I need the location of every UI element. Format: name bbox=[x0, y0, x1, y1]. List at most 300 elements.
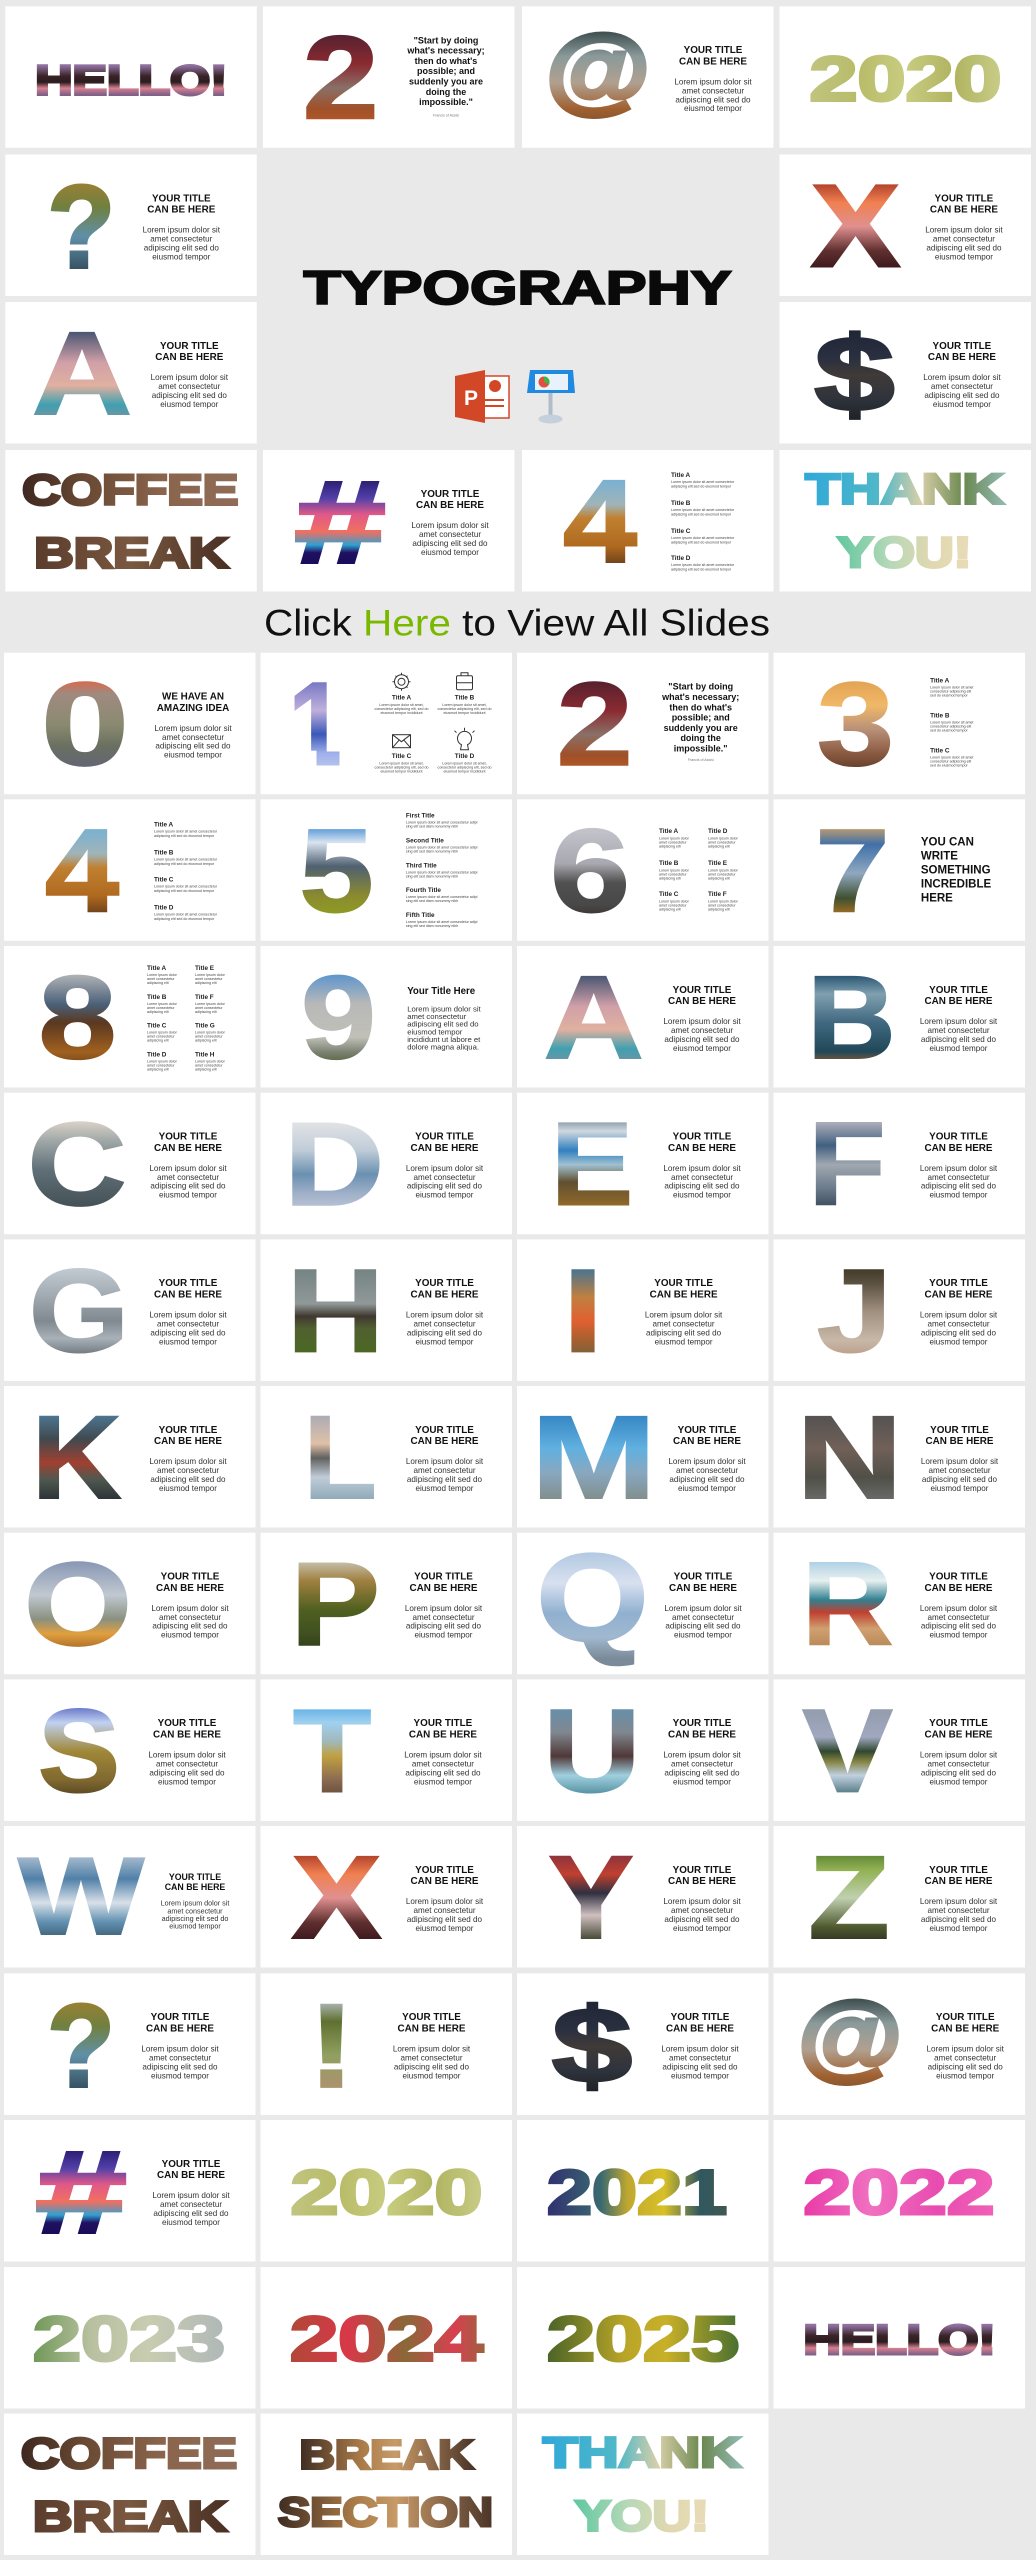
list: amet consectetur bbox=[708, 872, 736, 876]
body: Lorem ipsum dolor sit bbox=[664, 1604, 742, 1613]
body: amet consectetur bbox=[412, 1613, 475, 1622]
quote text: then do what's bbox=[669, 702, 732, 712]
body: amet consectetur bbox=[672, 1613, 734, 1622]
body: amet consectetur bbox=[159, 1613, 221, 1622]
letter O: O bbox=[24, 1539, 132, 1671]
letter S: S bbox=[38, 1685, 120, 1817]
body: Lorem ipsum dolor sit bbox=[143, 226, 220, 235]
title: YOUR TITLE bbox=[929, 1718, 988, 1729]
body: eiusmod tempor bbox=[159, 1484, 217, 1493]
list: Lorem ipsum dolor sit amet consectetur bbox=[671, 536, 735, 540]
body: eiusmod tempor bbox=[415, 1337, 474, 1346]
title: CAN BE HERE bbox=[673, 1436, 741, 1447]
body: amet consectetur bbox=[412, 1760, 474, 1769]
body: eiusmod tempor bbox=[402, 2071, 461, 2080]
slide: HELLO! bbox=[774, 2267, 1025, 2408]
body: amet consectetur bbox=[156, 1760, 218, 1769]
list: Title A bbox=[154, 821, 174, 828]
body: eiusmod tempor bbox=[158, 1777, 216, 1786]
slide: HELLO! bbox=[5, 6, 257, 148]
list: Title A bbox=[930, 678, 950, 685]
body: amet consectetur bbox=[157, 1466, 219, 1475]
word: COFFEE: COFFEE bbox=[21, 2430, 237, 2478]
list: sed do eiusmod tempor bbox=[930, 694, 968, 698]
list: adipiscing elit sed do eiusmod tempor bbox=[154, 862, 215, 866]
title: YOUR TITLE bbox=[414, 1572, 473, 1582]
captions: Title D bbox=[455, 753, 475, 760]
title: YOUR TITLE bbox=[929, 985, 988, 996]
body: adipiscing elit sed do bbox=[922, 1475, 998, 1484]
slide: I bbox=[517, 1239, 768, 1381]
letter X: X bbox=[810, 160, 900, 292]
list: Title E bbox=[708, 860, 728, 867]
quote text: then do what's bbox=[415, 56, 477, 66]
body: Lorem ipsum dolor sit bbox=[921, 1457, 998, 1466]
body: amet consectetur bbox=[682, 86, 744, 95]
list: Title C bbox=[147, 1022, 167, 1030]
body: Lorem ipsum dolor sit bbox=[154, 724, 232, 733]
body: adipiscing elit sed do bbox=[152, 1622, 228, 1631]
word: BREAK: BREAK bbox=[300, 2432, 474, 2478]
letter J: J bbox=[817, 1245, 892, 1377]
body: amet consectetur bbox=[160, 2200, 222, 2209]
body: eiusmod tempor bbox=[407, 1027, 463, 1036]
letter D: D bbox=[284, 1099, 384, 1231]
slide: 7 bbox=[774, 799, 1025, 941]
list: Lorem ipsum dolor bbox=[195, 1002, 226, 1006]
icon: gear bbox=[392, 673, 410, 691]
body: adipiscing elit sed do bbox=[921, 1035, 997, 1044]
body: eiusmod tempor bbox=[415, 1924, 474, 1933]
list: Lorem ipsum dolor sit amet consectetur adipi bbox=[406, 845, 478, 849]
list: Third Title bbox=[406, 862, 437, 869]
captions: eiusmod tempor incididunt bbox=[444, 711, 485, 715]
word: 2022: 2022 bbox=[804, 2158, 994, 2228]
body: adipiscing elit sed do bbox=[150, 1328, 226, 1337]
slide: A bbox=[5, 302, 257, 444]
body: Lorem ipsum dolor sit bbox=[645, 1311, 722, 1320]
list: Lorem ipsum dolor sit amet consectetur bbox=[154, 884, 218, 888]
body: amet consectetur bbox=[167, 1906, 223, 1915]
body: eiusmod tempor bbox=[674, 1631, 732, 1640]
captions: Title A bbox=[392, 695, 411, 702]
title: YOUR TITLE bbox=[162, 2159, 220, 2170]
title: TYPOGRAPHY: TYPOGRAPHY bbox=[304, 261, 732, 314]
body: adipiscing elit sed do bbox=[921, 1328, 997, 1337]
letter V: V bbox=[802, 1685, 892, 1817]
list: sing elit sed diam nonummy nibh bbox=[406, 849, 458, 853]
letter Z: Z bbox=[808, 1832, 890, 1964]
captions: eiusmod tempor incididunt bbox=[381, 770, 422, 774]
body: amet consectetur bbox=[413, 1466, 476, 1475]
body: adipiscing elit sed do bbox=[142, 2062, 218, 2071]
list: amet consectetur bbox=[659, 872, 687, 876]
numeral 5: 5 bbox=[300, 805, 374, 937]
quote text: what's necessary; bbox=[406, 46, 485, 56]
body: eiusmod tempor bbox=[673, 1191, 731, 1200]
body: amet consectetur bbox=[927, 1760, 990, 1769]
letter A: A bbox=[544, 952, 644, 1084]
title: YOUR TITLE bbox=[415, 1278, 474, 1289]
slide: N bbox=[774, 1386, 1025, 1528]
title: CAN BE HERE bbox=[925, 1436, 994, 1447]
list: amet consectetur bbox=[659, 840, 687, 844]
list: Lorem ipsum dolor bbox=[659, 868, 690, 872]
title: CAN BE HERE bbox=[157, 2170, 225, 2181]
title: CAN BE HERE bbox=[931, 2024, 1000, 2035]
title: CAN BE HERE bbox=[410, 1143, 479, 1154]
body: eiusmod tempor bbox=[673, 1924, 731, 1933]
title: CAN BE HERE bbox=[924, 1730, 993, 1741]
list: Title C bbox=[671, 528, 691, 535]
title: CAN BE HERE bbox=[397, 2024, 466, 2035]
body: eiusmod tempor bbox=[936, 2071, 995, 2080]
body: adipiscing elit sed do bbox=[162, 1914, 228, 1923]
captions: Lorem ipsum dolor sit amet, bbox=[442, 762, 487, 766]
list: adipiscing elit sed do eiusmod tempor bbox=[671, 568, 732, 572]
title: YOUR TITLE bbox=[678, 1425, 736, 1436]
title: YOUR TITLE bbox=[929, 1132, 988, 1142]
body: Lorem ipsum dolor sit bbox=[406, 1457, 483, 1466]
body: amet consectetur bbox=[149, 2054, 211, 2063]
body: eiusmod tempor bbox=[678, 1484, 736, 1493]
list: Lorem ipsum dolor bbox=[195, 1060, 226, 1064]
body: Lorem ipsum dolor sit bbox=[404, 1751, 482, 1760]
title: YOUR TITLE bbox=[654, 1278, 713, 1289]
word: BREAK: BREAK bbox=[34, 530, 228, 578]
slide: H bbox=[260, 1239, 512, 1381]
title: YOUR TITLE bbox=[159, 1425, 217, 1436]
letter G: G bbox=[29, 1245, 129, 1377]
body: amet consectetur bbox=[157, 1320, 219, 1329]
list: Title B bbox=[659, 860, 679, 867]
list: Lorem ipsum dolor bbox=[147, 1030, 178, 1034]
icon: PowerPoint: P bbox=[464, 387, 478, 410]
title: YOUR TITLE bbox=[673, 985, 731, 996]
body: Lorem ipsum dolor sit bbox=[411, 521, 489, 530]
word: YOU!: YOU! bbox=[838, 529, 972, 577]
title: CAN BE HERE bbox=[924, 1583, 993, 1594]
title: CAN BE HERE bbox=[147, 205, 216, 216]
list: sing elit sed diam nonummy nibh bbox=[406, 874, 458, 878]
body: Lorem ipsum dolor sit bbox=[920, 1751, 997, 1760]
title: CAN BE HERE bbox=[410, 1876, 479, 1887]
body: adipiscing elit sed do bbox=[407, 1182, 483, 1191]
word: 2021: 2021 bbox=[547, 2158, 727, 2228]
body: adipiscing elit sed do bbox=[144, 244, 219, 252]
list: Lorem ipsum dolor sit amet bbox=[930, 686, 973, 690]
slide: question mark bbox=[5, 154, 257, 296]
title: CAN BE HERE bbox=[668, 1730, 736, 1741]
list bbox=[930, 678, 973, 768]
body: eiusmod tempor bbox=[414, 1777, 472, 1786]
body: Lorem ipsum dolor sit bbox=[151, 1604, 229, 1613]
list: amet consectetur bbox=[659, 903, 687, 907]
list: Lorem ipsum dolor sit amet consectetur bbox=[671, 508, 735, 512]
list: Lorem ipsum dolor bbox=[147, 973, 178, 977]
body: Lorem ipsum dolor sit bbox=[149, 1164, 227, 1173]
list: Lorem ipsum dolor sit amet bbox=[930, 721, 973, 725]
body: adipiscing elit sed do bbox=[664, 1035, 740, 1044]
list: Lorem ipsum dolor sit amet consectetur adipi bbox=[406, 820, 478, 824]
title: CAN BE HERE bbox=[155, 352, 224, 363]
slide: E bbox=[517, 1093, 768, 1234]
body: adipiscing elit sed do bbox=[924, 391, 1000, 400]
letter F: F bbox=[808, 1099, 886, 1231]
quote text: suddenly you are bbox=[664, 723, 738, 733]
list: Lorem ipsum dolor sit amet consectetur bbox=[154, 857, 218, 861]
slide: J bbox=[774, 1239, 1025, 1381]
body: eiusmod tempor bbox=[929, 1337, 988, 1346]
list: sing elit sed diam nonummy nibh bbox=[406, 924, 458, 928]
headline: YOU CAN bbox=[921, 836, 974, 848]
list: adipiscing elit bbox=[708, 876, 730, 880]
list: amet consectetur bbox=[147, 1034, 175, 1038]
list: adipiscing elit sed do eiusmod tempor bbox=[154, 834, 215, 838]
list: Fourth Title bbox=[406, 887, 441, 894]
list: Title C bbox=[154, 876, 174, 883]
list: Title B bbox=[671, 500, 691, 507]
slide: question mark bbox=[4, 1973, 256, 2115]
letter L: L bbox=[304, 1392, 377, 1524]
list bbox=[406, 812, 478, 928]
list: Title B bbox=[147, 994, 167, 1001]
body: eiusmod tempor bbox=[671, 2071, 729, 2080]
body: amet consectetur bbox=[671, 1026, 733, 1035]
body: Lorem ipsum dolor sit bbox=[920, 1164, 997, 1173]
slide: Y bbox=[517, 1826, 768, 1968]
body: adipiscing elit sed do bbox=[669, 1475, 745, 1484]
title: YOUR TITLE bbox=[674, 1572, 732, 1582]
word: BREAK: BREAK bbox=[33, 2493, 227, 2541]
body: eiusmod tempor bbox=[929, 1044, 988, 1053]
body: adipiscing elit sed do bbox=[646, 1328, 722, 1337]
body: Lorem ipsum dolor sit bbox=[920, 1897, 997, 1906]
slide: at sign bbox=[774, 1973, 1025, 2115]
body: incididunt ut labore et bbox=[407, 1035, 481, 1044]
list: Lorem ipsum dolor sit amet consectetur bbox=[154, 829, 218, 833]
body: Lorem ipsum dolor sit bbox=[920, 1311, 997, 1320]
letter H: H bbox=[287, 1245, 384, 1377]
body: eiusmod tempor bbox=[151, 2071, 209, 2080]
slide: 4 list bbox=[4, 799, 256, 941]
title: YOUR TITLE bbox=[415, 1425, 474, 1436]
slide: O bbox=[4, 1533, 256, 1674]
list: adipiscing elit bbox=[708, 907, 730, 911]
list: adipiscing elit sed do eiusmod tempor bbox=[671, 484, 732, 488]
list: Title A bbox=[671, 472, 691, 479]
list: Title B bbox=[930, 713, 950, 720]
body: adipiscing elit sed do bbox=[665, 1622, 741, 1631]
quote text: "Start by doing bbox=[668, 682, 733, 692]
body: eiusmod tempor bbox=[929, 1777, 988, 1786]
body: amet consectetur bbox=[931, 382, 993, 391]
numeral 2: 2 bbox=[557, 659, 633, 791]
title: CAN BE HERE bbox=[924, 996, 993, 1007]
body: amet consectetur bbox=[400, 2054, 463, 2063]
title: YOUR TITLE bbox=[159, 1278, 217, 1289]
body: Lorem ipsum dolor sit bbox=[663, 1751, 741, 1760]
slide: Q bbox=[517, 1529, 768, 1674]
title: CAN BE HERE bbox=[410, 1290, 479, 1301]
body: amet consectetur bbox=[413, 1320, 476, 1329]
body: Lorem ipsum dolor sit bbox=[149, 1457, 227, 1466]
slide: 2022 bbox=[774, 2120, 1025, 2262]
body: amet consectetur bbox=[413, 1906, 476, 1915]
letter A: A bbox=[32, 308, 132, 440]
word: COFFEE: COFFEE bbox=[22, 466, 238, 514]
body: adipiscing elit sed do bbox=[664, 1182, 740, 1191]
list: adipiscing elit sed do eiusmod tempor bbox=[671, 512, 732, 516]
slide: 0 bbox=[4, 653, 256, 794]
title: YOUR TITLE bbox=[673, 1718, 731, 1729]
slide: 9 bbox=[260, 946, 512, 1088]
captions: consectetur adipiscing elit, sed do bbox=[438, 766, 491, 770]
body: adipiscing elit sed do bbox=[928, 2062, 1003, 2071]
title: YOUR TITLE bbox=[151, 2012, 209, 2023]
quote text: possible; and bbox=[672, 713, 730, 723]
title: YOUR TITLE bbox=[415, 1132, 474, 1142]
list: amet consectetur bbox=[147, 1006, 175, 1010]
title: YOUR TITLE bbox=[684, 45, 742, 56]
list: amet consectetur bbox=[147, 1064, 175, 1068]
body: amet consectetur bbox=[934, 2054, 997, 2063]
list: adipiscing elit bbox=[195, 1068, 217, 1072]
body: adipiscing elit sed do bbox=[149, 1768, 225, 1777]
title: CAN BE HERE bbox=[154, 1436, 222, 1447]
body: eiusmod tempor bbox=[930, 1484, 989, 1493]
numeral 0: 0 bbox=[41, 659, 129, 791]
captions: Title B bbox=[455, 695, 475, 702]
list: adipiscing elit bbox=[195, 1038, 217, 1042]
body: adipiscing elit sed do bbox=[405, 1768, 481, 1777]
slide: U bbox=[517, 1679, 768, 1821]
body: Lorem ipsum dolor sit bbox=[393, 2045, 470, 2054]
slide: L bbox=[260, 1386, 512, 1528]
body: adipiscing elit sed do bbox=[394, 2062, 470, 2071]
body: Lorem ipsum dolor sit bbox=[149, 1311, 227, 1320]
title: CAN BE HERE bbox=[669, 1583, 737, 1594]
title: CAN BE HERE bbox=[668, 1876, 736, 1887]
body: adipiscing elit sed do bbox=[150, 1475, 226, 1484]
body: amet consectetur bbox=[413, 1173, 476, 1182]
body: Lorem ipsum dolor sit bbox=[668, 1457, 746, 1466]
title: CAN BE HERE bbox=[924, 1876, 993, 1887]
list: amet consectetur bbox=[195, 1034, 223, 1038]
list: consectetur adipiscing elit bbox=[930, 725, 971, 729]
body: eiusmod tempor bbox=[415, 1191, 474, 1200]
body: Lorem ipsum dolor sit bbox=[920, 1017, 997, 1026]
quote text: doing the bbox=[680, 733, 721, 743]
title: YOUR TITLE bbox=[929, 1865, 988, 1876]
title: CAN BE HERE bbox=[924, 1143, 993, 1154]
body: amet consectetur bbox=[162, 733, 224, 742]
body: amet consectetur bbox=[927, 1026, 990, 1035]
letter U: U bbox=[544, 1685, 640, 1817]
quote text: possible; and bbox=[417, 66, 475, 76]
list: adipiscing elit bbox=[195, 1010, 217, 1014]
list: adipiscing elit bbox=[708, 844, 730, 848]
quote text: suddenly you are bbox=[409, 76, 483, 86]
numeral 6: 6 bbox=[550, 805, 630, 937]
numeral 2: 2 bbox=[303, 12, 379, 144]
slide: D bbox=[260, 1093, 512, 1234]
title: CAN BE HERE bbox=[679, 56, 747, 67]
letter Y: Y bbox=[548, 1832, 634, 1964]
slide: exclamation mark bbox=[260, 1973, 512, 2115]
captions bbox=[375, 695, 491, 774]
body: eiusmod tempor bbox=[162, 2218, 220, 2227]
list: First Title bbox=[406, 812, 435, 819]
title: YOUR TITLE bbox=[160, 341, 219, 352]
body: amet consectetur bbox=[158, 382, 221, 391]
list: Lorem ipsum dolor bbox=[195, 973, 226, 977]
body: Lorem ipsum dolor sit bbox=[661, 2045, 739, 2054]
list: adipiscing elit sed do eiusmod tempor bbox=[671, 540, 732, 544]
list: Lorem ipsum dolor bbox=[195, 1030, 226, 1034]
body: Lorem ipsum dolor sit bbox=[925, 226, 1003, 235]
letter P: P bbox=[291, 1539, 380, 1671]
title: YOUR TITLE bbox=[415, 1865, 474, 1876]
word: 2020: 2020 bbox=[290, 2158, 482, 2228]
captions: Lorem ipsum dolor sit amet, bbox=[442, 703, 487, 707]
body: adipiscing elit sed do bbox=[407, 1475, 483, 1484]
list: sed do eiusmod tempor bbox=[930, 729, 968, 733]
letter N: N bbox=[796, 1392, 902, 1524]
body: adipiscing elit sed do bbox=[412, 539, 488, 548]
headline: WRITE bbox=[921, 850, 958, 862]
body: amet consectetur bbox=[927, 1320, 990, 1329]
word: THANK: THANK bbox=[543, 2429, 741, 2477]
letter K: K bbox=[32, 1392, 121, 1524]
captions: eiusmod tempor incididunt bbox=[444, 770, 485, 774]
body: Lorem ipsum dolor sit bbox=[148, 1751, 226, 1760]
slide: X bbox=[260, 1826, 512, 1968]
list: consectetur adipiscing elit bbox=[930, 690, 971, 694]
numeral 3: 3 bbox=[817, 659, 894, 791]
list: adipiscing elit bbox=[195, 981, 217, 985]
slide: COFFEE BREAK bbox=[4, 2414, 256, 2555]
body: eiusmod tempor bbox=[159, 1191, 217, 1200]
body: adipiscing elit sed do bbox=[921, 1182, 997, 1191]
body: Lorem ipsum dolor sit bbox=[663, 1164, 741, 1173]
title: AMAZING IDEA bbox=[157, 703, 229, 714]
letter M: M bbox=[531, 1392, 656, 1524]
icon: briefcase bbox=[456, 673, 472, 690]
body: eiusmod tempor bbox=[415, 1484, 474, 1493]
title: YOUR TITLE bbox=[935, 193, 993, 204]
body: amet consectetur bbox=[927, 1906, 990, 1915]
list: adipiscing elit bbox=[659, 876, 681, 880]
slide: quote 2 bbox=[263, 6, 514, 148]
title: YOUR TITLE bbox=[159, 1132, 217, 1142]
body: Lorem ipsum dolor sit bbox=[405, 1604, 482, 1613]
list: amet consectetur bbox=[195, 1064, 223, 1068]
attribution: Francis of Assisi bbox=[688, 758, 714, 762]
slide: dollar bbox=[780, 302, 1031, 444]
title: CAN BE HERE bbox=[410, 1436, 479, 1447]
list: Second Title bbox=[406, 837, 444, 844]
letter W: W bbox=[18, 1835, 144, 1958]
captions: consectetur adipiscing elit, sed do bbox=[438, 707, 491, 711]
slide: hash bbox=[4, 2120, 256, 2262]
list: Title C bbox=[659, 891, 679, 898]
word: SECTION: SECTION bbox=[278, 2489, 493, 2535]
title: CAN BE HERE bbox=[928, 352, 996, 363]
list: Title D bbox=[671, 555, 691, 562]
slide: 5 list bbox=[260, 799, 512, 941]
body: amet consectetur bbox=[927, 1613, 990, 1622]
